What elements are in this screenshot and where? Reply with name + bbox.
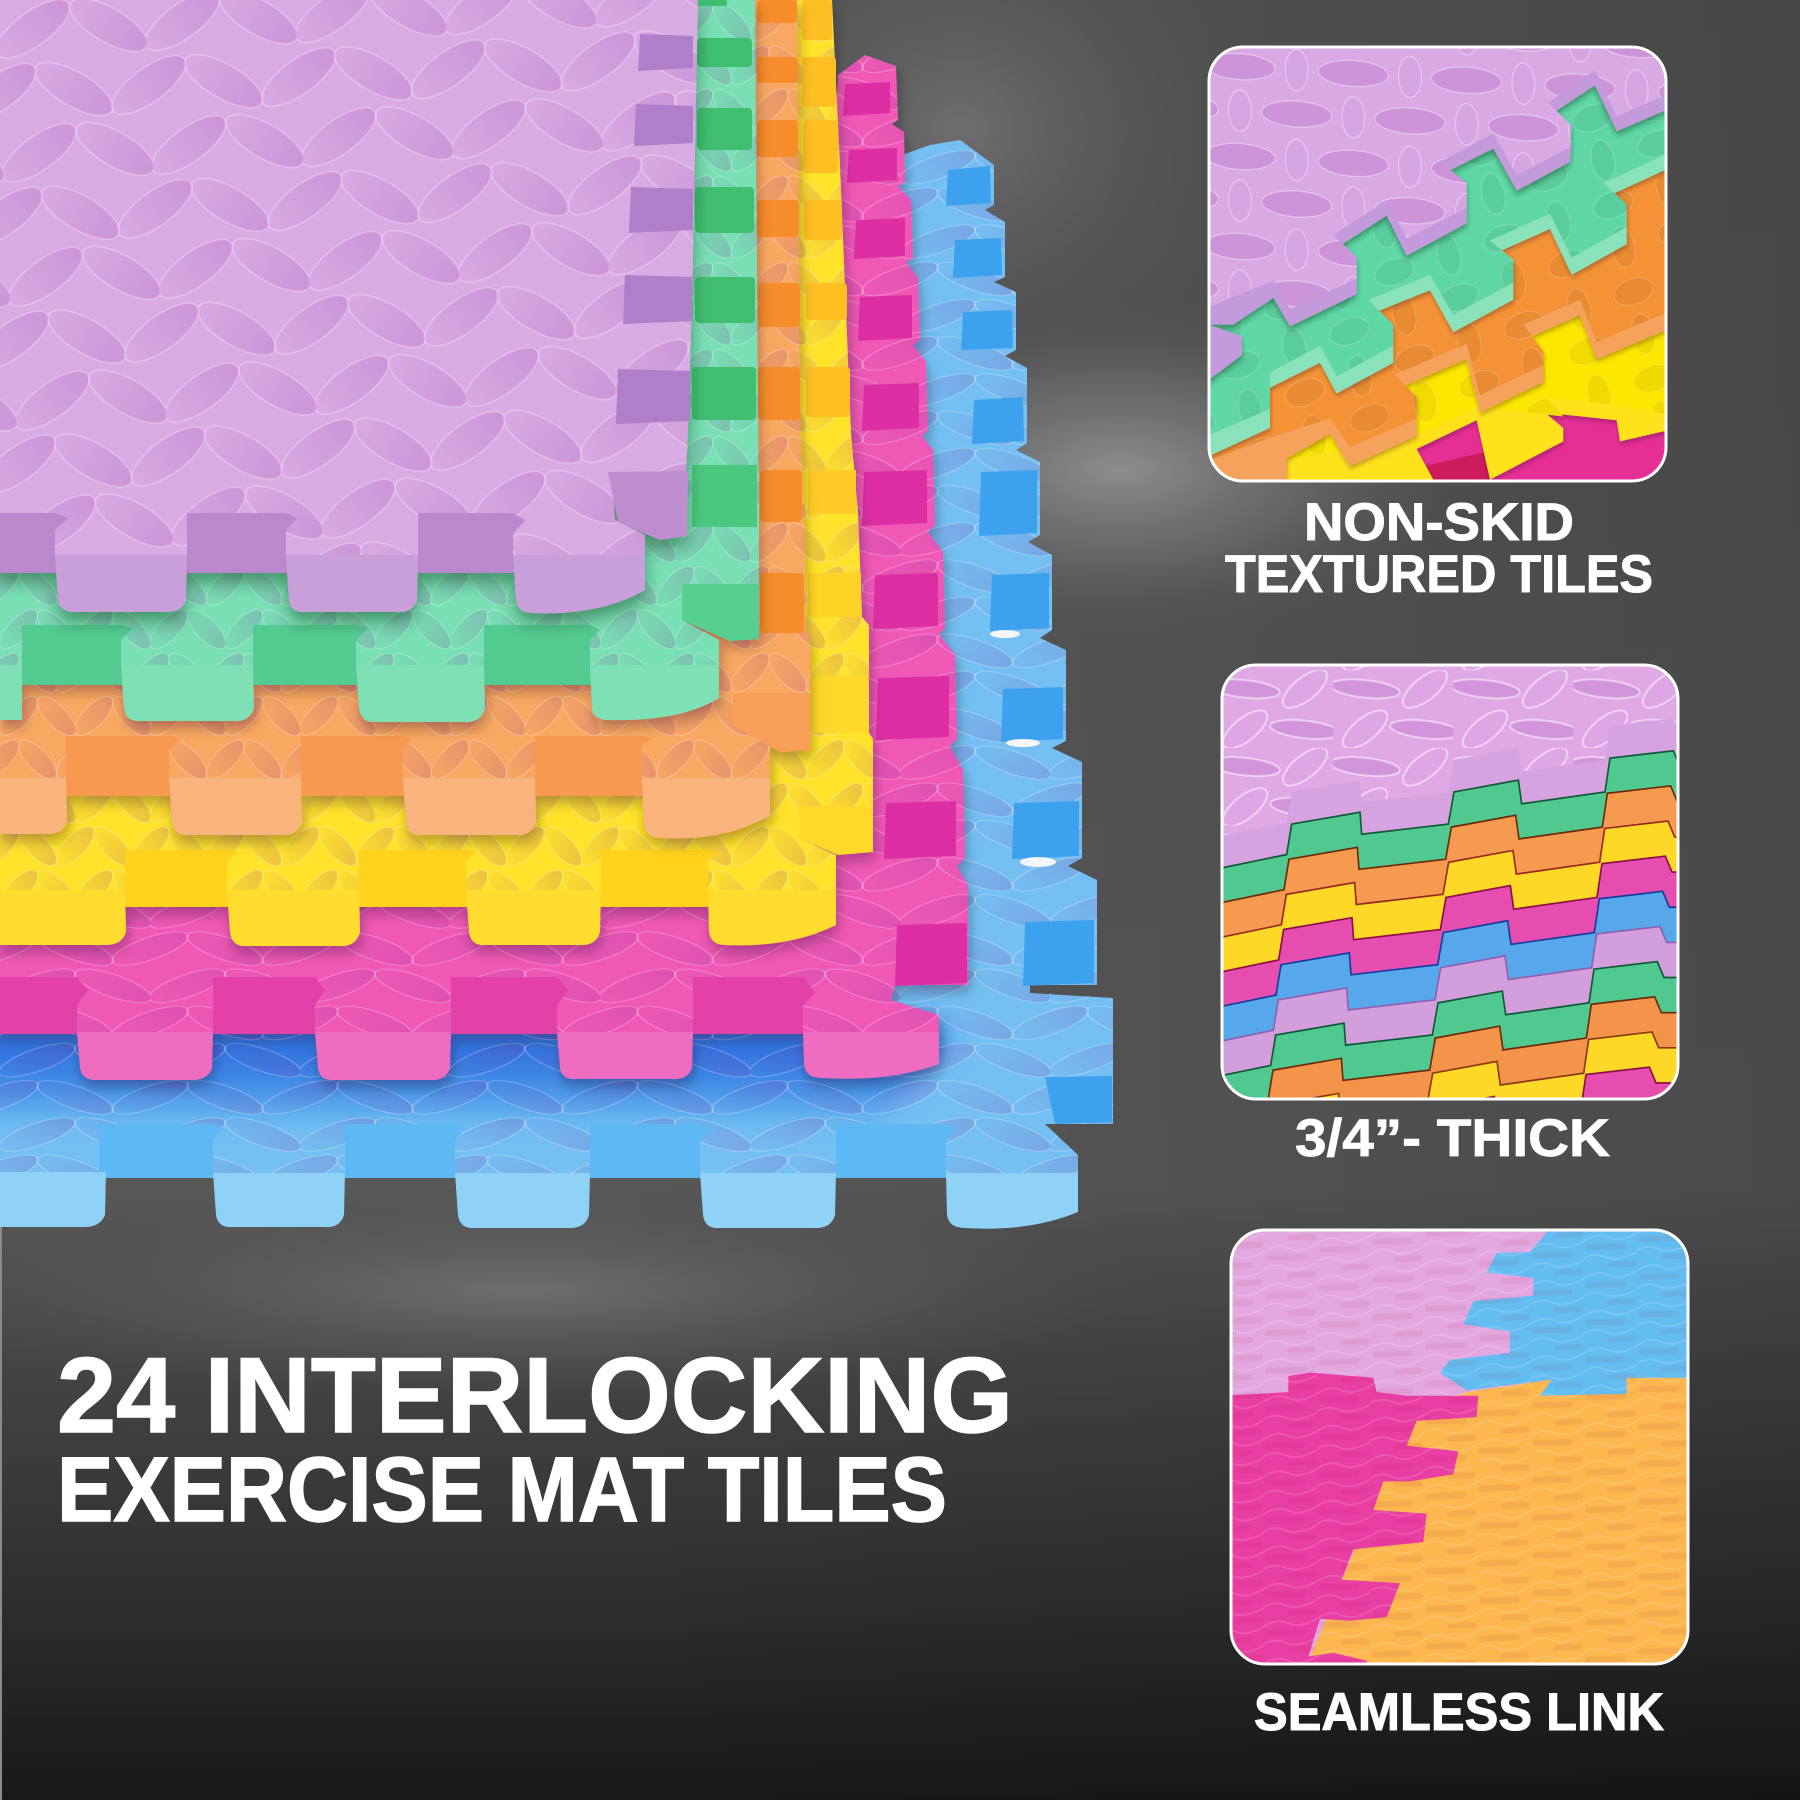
pink recess faces [0, 977, 821, 1034]
orange recess faces [62, 736, 660, 796]
green layer [1210, 86, 1664, 460]
green mat [0, 0, 759, 722]
yellow mat [0, 0, 873, 946]
title: 24 INTERLOCKING [57, 1335, 1013, 1455]
blue mat [0, 130, 1113, 1229]
green right side faces [682, 0, 759, 641]
caption: SEAMLESS LINK [1254, 1683, 1664, 1742]
orange layer [1212, 170, 1664, 480]
colored bands [1224, 750, 1676, 1098]
purple recess faces [0, 513, 531, 573]
yellow right side faces [799, 0, 873, 855]
orange tile [1303, 1378, 1693, 1674]
purple front teeth [55, 555, 645, 613]
blue top surface [0, 130, 1113, 1175]
white gaps in blue edge [990, 630, 1056, 867]
green recess faces [18, 625, 608, 685]
yellow front teeth [0, 890, 836, 946]
blue tile [1440, 1224, 1693, 1396]
pink front teeth [77, 1032, 939, 1080]
purple mat [0, 0, 698, 613]
caption: 3/4”- THICK [1295, 1109, 1610, 1168]
blue recess faces [95, 1124, 964, 1178]
caption: TEXTURED TILES [1225, 545, 1653, 604]
caption [1225, 493, 1653, 604]
green front teeth [0, 665, 719, 722]
purple right notches [608, 34, 693, 540]
title [57, 1335, 1013, 1541]
orange right side faces [733, 0, 810, 752]
title: EXERCISE MAT TILES [57, 1439, 947, 1541]
yellow recess faces [121, 850, 726, 907]
card photo: stacked textured tiles [1210, 48, 1664, 480]
pink tile [1223, 1372, 1478, 1674]
orange mat [0, 0, 810, 839]
card photo: stack cross-section [1224, 666, 1676, 1098]
orange front teeth [0, 778, 770, 839]
card border [1231, 1230, 1688, 1664]
pink right side faces [843, 82, 967, 986]
blue right side faces [946, 166, 1112, 1124]
panel: 3/4 inch thick [1220, 664, 1680, 1158]
yellow layer [1286, 315, 1664, 480]
panel: seamless link [1230, 1228, 1690, 1731]
panel: non-skid textured tiles [1208, 46, 1668, 593]
card photo: four joined tiles [1232, 1232, 1686, 1662]
blue front teeth [0, 1172, 1078, 1229]
pink top surface [0, 55, 968, 1033]
purple layer [1203, 30, 1670, 384]
purple top surface [0, 0, 698, 556]
purple tooth faces [1224, 719, 1676, 866]
yellow top surface [0, 0, 873, 890]
card border [1209, 47, 1666, 481]
caption: NON-SKID [1304, 493, 1574, 552]
card border [1222, 665, 1678, 1099]
mat stack [0, 0, 1113, 1229]
green top surface [0, 0, 759, 665]
pink mat [0, 55, 968, 1080]
orange top surface [0, 0, 810, 778]
tile texture [1232, 1232, 1686, 1662]
